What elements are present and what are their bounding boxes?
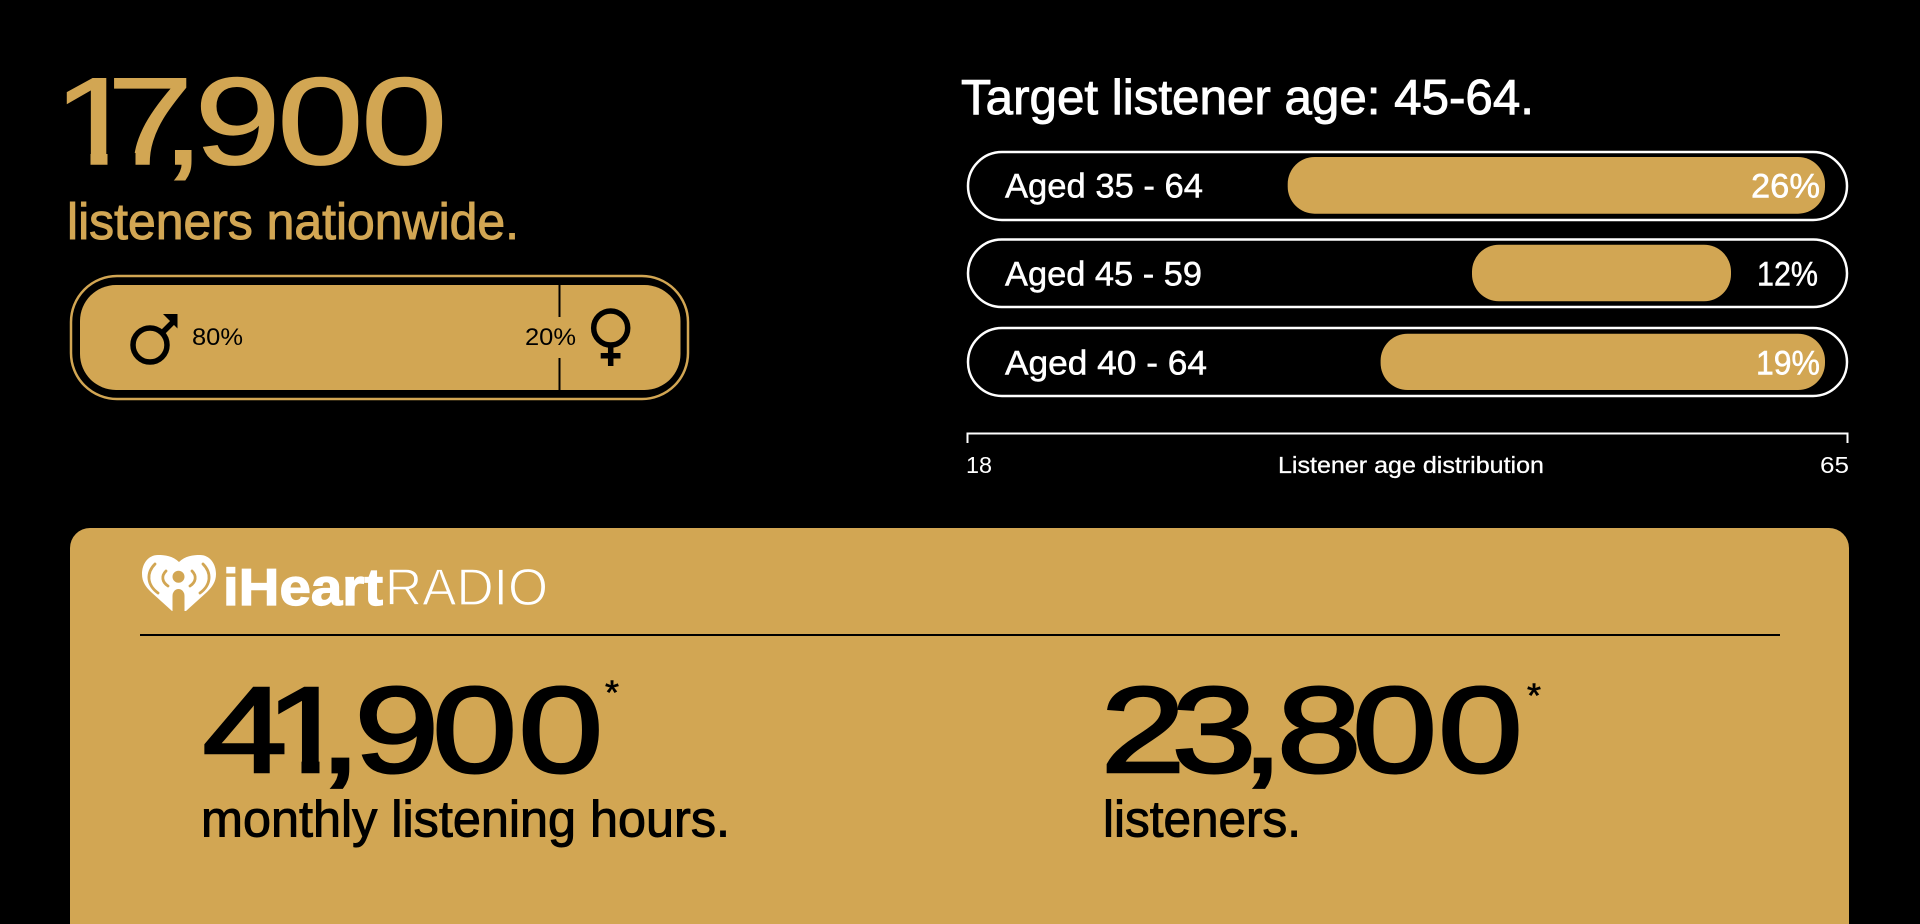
axis: listener age distribution <box>966 434 1849 478</box>
axis: listener age distribution: 65 <box>1820 452 1849 478</box>
stat: listeners: * <box>1527 677 1541 715</box>
row: aged 40-64: Aged 40 - 64 <box>1005 344 1207 382</box>
icon: iHeart logo heart <box>142 555 216 611</box>
row: aged 35-64: 26% <box>1751 167 1820 205</box>
stat: listeners: 23,800 <box>1101 662 1523 799</box>
heading: target listener age: Target listener age: 45-64. <box>961 71 1534 125</box>
stat: monthly listening hours: 41,900 <box>202 662 603 799</box>
axis: listener age distribution: 18 <box>966 452 992 478</box>
stat: monthly listening hours: * <box>605 674 619 712</box>
logo wordmark: RADIO: RADIO <box>385 559 548 617</box>
row: aged 45-59 <box>968 240 1847 307</box>
row: aged 40-64 <box>968 328 1847 396</box>
stat: listeners: listeners. <box>1103 791 1301 848</box>
chart: age distribution bars <box>968 152 1847 396</box>
stat: monthly listening hours <box>201 662 730 848</box>
row: aged 40-64: 19% <box>1756 344 1820 382</box>
axis: listener age distribution: Listener age distribution <box>1278 452 1544 478</box>
icon: male symbol <box>133 314 178 362</box>
icon: female symbol <box>594 311 628 366</box>
row: aged 45-59: Aged 45 - 59 <box>1005 255 1202 293</box>
row: aged 35-64: Aged 35 - 64 <box>1005 167 1203 205</box>
big number: nationwide listeners: 17,900 <box>53 52 447 191</box>
caption: listeners nationwide: listeners nationwide. <box>67 193 519 250</box>
row: aged 35-64 <box>968 152 1847 220</box>
logo wordmark: iHeart: iHeart <box>223 559 383 617</box>
panel: iHeartRADIO stats <box>70 528 1849 924</box>
label: female percentage: 20% <box>525 324 576 351</box>
row: aged 45-59: 12% <box>1757 255 1818 293</box>
panel: gender split pill <box>71 276 688 399</box>
label: male percentage: 80% <box>192 324 243 351</box>
stat: monthly listening hours: monthly listening hours. <box>201 791 730 848</box>
